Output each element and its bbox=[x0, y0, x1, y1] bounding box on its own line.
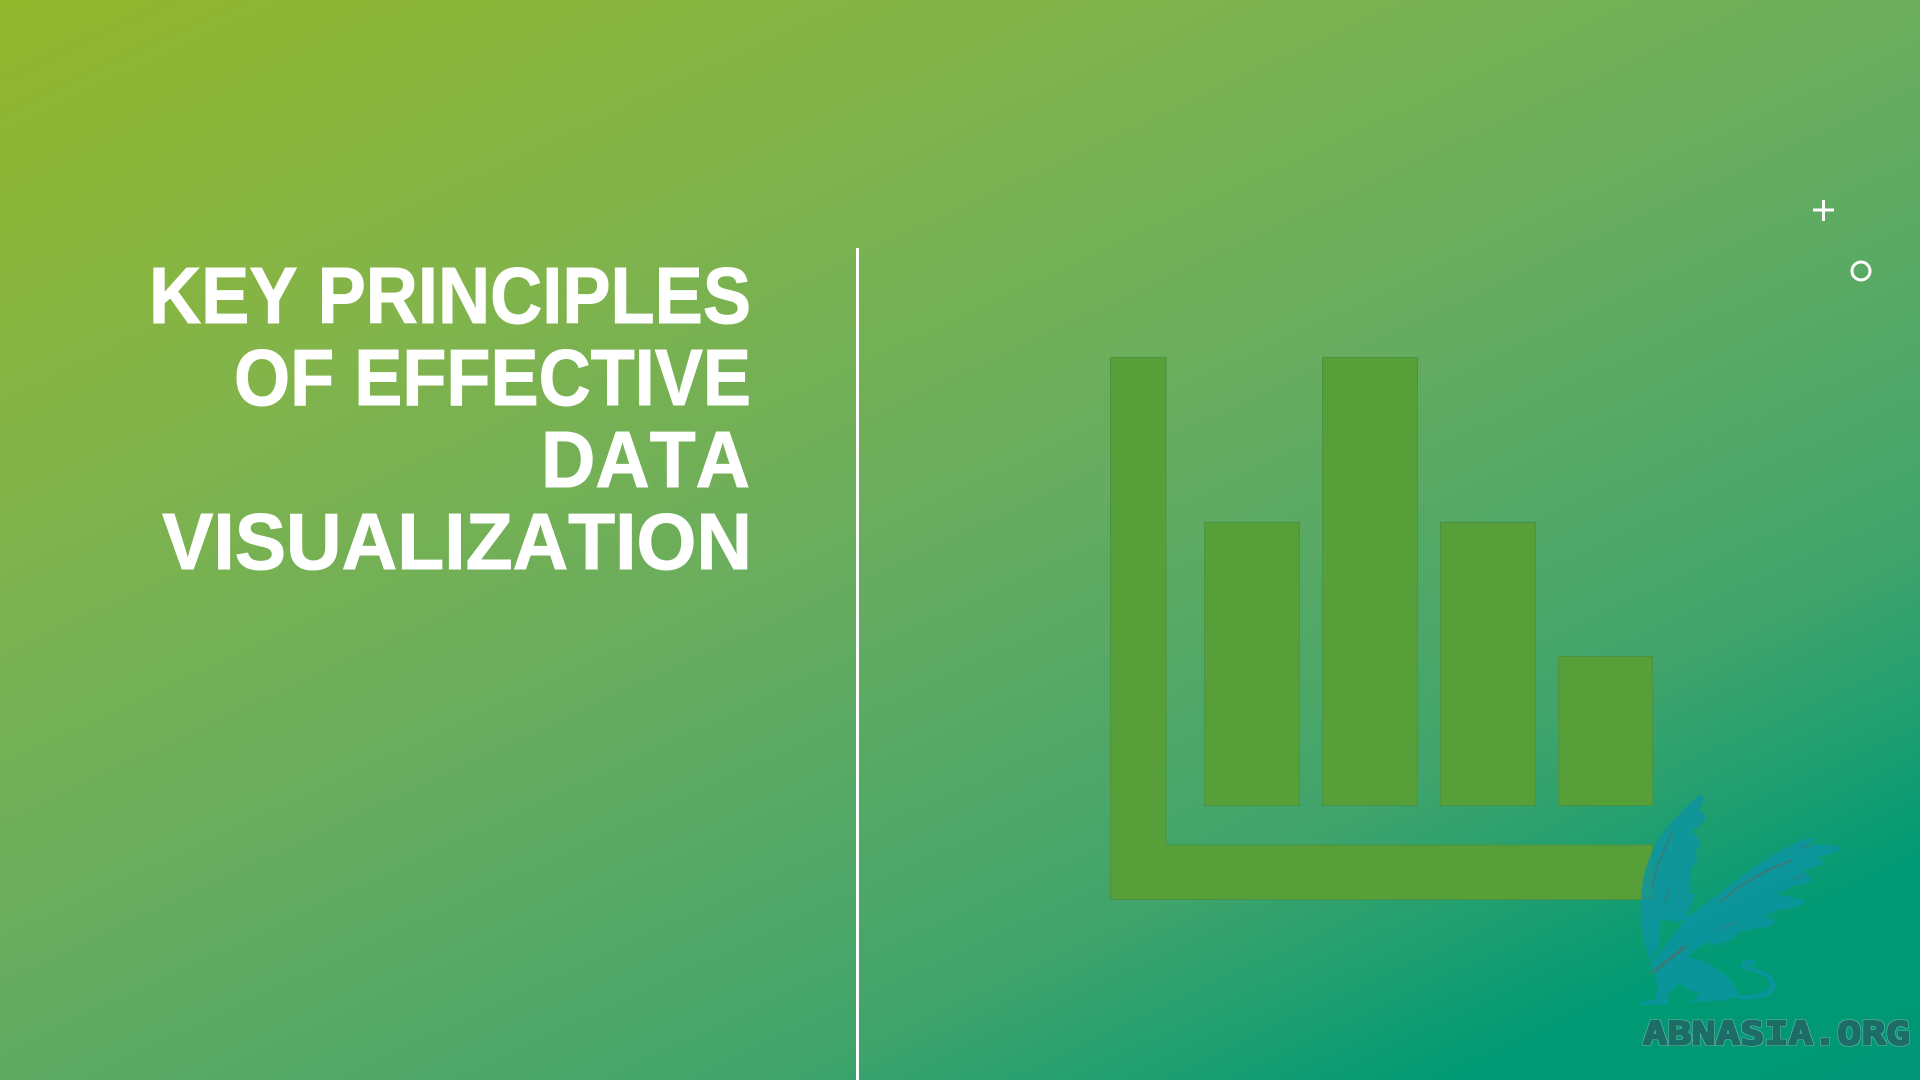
icon: circle bbox=[1852, 262, 1870, 280]
bar 4 bbox=[1558, 656, 1652, 806]
bar chart icon bbox=[1110, 358, 1652, 900]
title: KEY PRINCIPLES bbox=[149, 251, 751, 340]
title bbox=[149, 251, 752, 586]
vertical divider line bbox=[856, 248, 859, 1080]
title: OF EFFECTIVE bbox=[234, 333, 751, 422]
bar 2 bbox=[1322, 358, 1418, 806]
logo: griffin mark bbox=[1640, 795, 1842, 1005]
title: VISUALIZATION bbox=[162, 497, 752, 586]
title: DATA bbox=[541, 415, 750, 504]
logo: wordmark: ABNASIA.ORG bbox=[1643, 1014, 1910, 1052]
chart axes bbox=[1110, 358, 1652, 900]
bar 1 bbox=[1204, 522, 1300, 806]
icon: plus bbox=[1813, 200, 1834, 221]
bar 3 bbox=[1440, 522, 1536, 806]
